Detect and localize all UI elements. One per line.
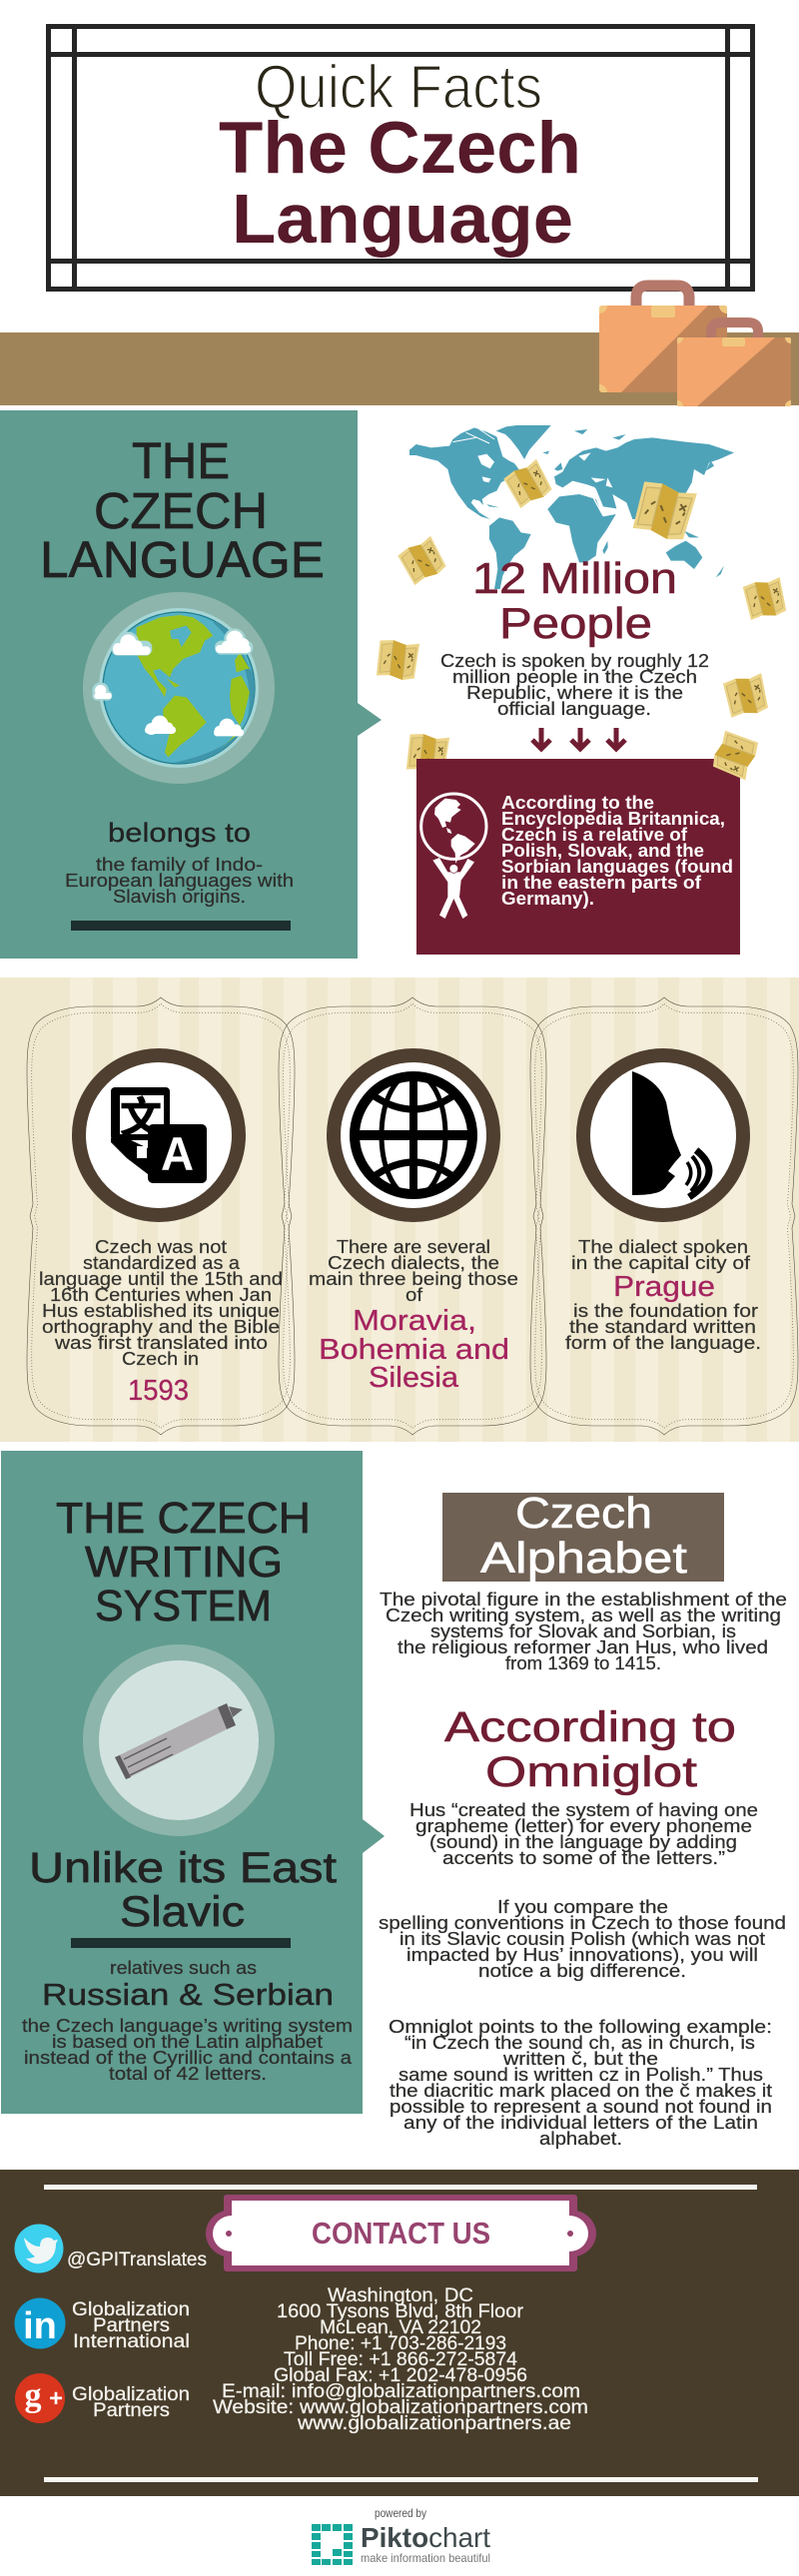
text: latin alphabet: total of 42 letters. bbox=[109, 2063, 267, 2084]
text: dialects: Czech dialects, the bbox=[328, 1252, 499, 1273]
icon: twitter bbox=[14, 2225, 64, 2272]
panel: the czech language bbox=[0, 410, 382, 959]
icon: map 7 bbox=[406, 733, 449, 775]
text: prague dialect: in the capital city of bbox=[571, 1252, 751, 1273]
text: hus quote: grapheme (letter) for every phoneme bbox=[415, 1815, 752, 1836]
icon: small suitcase bbox=[677, 318, 791, 406]
title: quick facts: Quick Facts bbox=[255, 53, 542, 121]
icon: google plus: + bbox=[49, 2385, 63, 2412]
icon: translate bbox=[79, 1055, 239, 1215]
icon: linkedin bbox=[14, 2298, 66, 2348]
text: prague: Prague bbox=[613, 1271, 715, 1303]
text: dialects: There are several bbox=[337, 1236, 490, 1257]
text: dialects: of bbox=[405, 1284, 423, 1305]
heading: according to omniglot: Omniglot bbox=[485, 1748, 697, 1796]
text: google plus name: Partners bbox=[93, 2400, 170, 2421]
text: comparing polish: impacted by Hus’ innovations), you will bbox=[406, 1944, 758, 1965]
icon: speaking face bbox=[583, 1055, 743, 1215]
text: relatives such as: relatives such as bbox=[110, 1957, 257, 1978]
icon: down arrows bbox=[532, 728, 625, 749]
heading: the czech writing system bbox=[56, 1494, 311, 1630]
text: czech speakers: Republic, where it is the bbox=[466, 682, 683, 703]
text: prague dialect: the standard written bbox=[569, 1316, 756, 1337]
text: address: E-mail: info@globalizationpartners.com bbox=[222, 2381, 580, 2402]
text: hus quote bbox=[409, 1799, 758, 1868]
icon: linkedin: in bbox=[23, 2305, 57, 2347]
text: comparing polish: in its Slavic cousin Polish (which was not bbox=[400, 1928, 765, 1949]
text: moravia bohemia silesia: Silesia bbox=[369, 1362, 459, 1394]
text: czech speakers: official language. bbox=[497, 698, 651, 719]
number: 1593: 1593 bbox=[128, 1375, 189, 1407]
card: standardization bbox=[27, 997, 295, 1435]
text: prague dialect: The dialect spoken bbox=[578, 1236, 748, 1257]
text: address bbox=[213, 2285, 588, 2434]
heading: according to omniglot: According to bbox=[444, 1703, 736, 1751]
text: moravia bohemia silesia bbox=[319, 1305, 509, 1394]
icon: translate: 文 bbox=[120, 1084, 162, 1145]
text: prague dialect: is the foundation for bbox=[573, 1300, 758, 1321]
logo: piktochart bbox=[312, 2522, 490, 2565]
heading: the czech language: THE bbox=[132, 432, 230, 489]
text: family of languages: the family of Indo- bbox=[96, 854, 263, 875]
text: czech speakers bbox=[440, 650, 709, 719]
text: family of languages: Slavish origins. bbox=[113, 886, 246, 907]
text: address: Toll Free: +1 866-272-5874 bbox=[284, 2349, 517, 2370]
text: jan hus: The pivotal figure in the establishment of the bbox=[380, 1589, 787, 1610]
text: britannica note: Encyclopedia Britannica, bbox=[501, 808, 725, 829]
heading: unlike its east slavic: Slavic bbox=[120, 1888, 245, 1936]
text: belongs to: belongs to bbox=[108, 818, 251, 848]
title: language: Language bbox=[232, 180, 573, 258]
heading: the czech language: LANGUAGE bbox=[40, 531, 325, 588]
text: latin alphabet: is based on the Latin alphabet bbox=[52, 2031, 323, 2052]
text: comparing polish bbox=[379, 1896, 786, 1981]
heading: unlike its east slavic: Unlike its East bbox=[29, 1844, 337, 1892]
icon: pen bbox=[83, 1644, 275, 1836]
text: linkedin name: Partners bbox=[93, 2315, 170, 2336]
panel: the czech writing system bbox=[1, 1451, 385, 2114]
heading: 12 million people: 12 Million bbox=[472, 554, 677, 603]
icon: map 4 bbox=[742, 576, 788, 622]
text: britannica note: Germany). bbox=[501, 888, 594, 909]
card: prague bbox=[530, 997, 798, 1435]
icon: piktochart mark bbox=[312, 2524, 353, 2565]
text: hus quote: accents to some of the letters.” bbox=[442, 1847, 725, 1868]
icon: map 6 bbox=[723, 672, 770, 719]
text: standardization: Czech in bbox=[122, 1348, 199, 1369]
text: address: Website: www.globalizationpartners.com bbox=[213, 2397, 588, 2418]
text: omniglot example: written č, but the bbox=[502, 2048, 658, 2069]
icon: map 5 bbox=[377, 639, 419, 681]
text: britannica note: in the eastern parts of bbox=[501, 872, 702, 893]
heading: the czech language: CZECH bbox=[94, 482, 268, 539]
text: omniglot example: any of the individual letters of the Latin bbox=[403, 2112, 758, 2133]
heading: the czech writing system: SYSTEM bbox=[95, 1582, 272, 1630]
text: dialects bbox=[309, 1236, 518, 1305]
text: moravia bohemia silesia: Bohemia and bbox=[319, 1334, 509, 1366]
icon: google plus: g bbox=[24, 2377, 42, 2414]
icon: map 2 bbox=[632, 479, 697, 543]
text: address: 1600 Tysons Blvd, 8th Floor bbox=[277, 2301, 524, 2322]
heading: the czech language bbox=[40, 432, 325, 588]
heading box: czech alphabet: Alphabet bbox=[480, 1534, 687, 1583]
text: jan hus: Czech writing system, as well as the writing bbox=[386, 1605, 781, 1625]
icon: map 3 bbox=[397, 535, 448, 587]
text: standardization: Hus established its unique bbox=[42, 1300, 280, 1321]
text: omniglot example: the diacritic mark placed on the č makes it bbox=[390, 2080, 772, 2101]
text: linkedin name: International bbox=[73, 2331, 190, 2352]
plaque: contact us bbox=[206, 2195, 596, 2271]
text: britannica note: Polish, Slovak, and the bbox=[501, 840, 704, 861]
tan band bbox=[0, 332, 799, 405]
panel: dialects band bbox=[0, 977, 799, 1442]
text: piktochart wordmark: Piktochart bbox=[361, 2522, 490, 2553]
heading: 12 million people bbox=[472, 554, 677, 648]
title frame bbox=[48, 26, 753, 290]
text: google plus name bbox=[72, 2384, 190, 2421]
divider bar bbox=[71, 1938, 291, 1948]
card: dialects bbox=[279, 997, 546, 1435]
text: czech speakers: million people in the Czech bbox=[452, 666, 697, 687]
text: standardization: language until the 15th and bbox=[39, 1268, 283, 1289]
text: google plus name: Globalization bbox=[72, 2384, 190, 2405]
text: britannica note bbox=[501, 792, 733, 909]
text: linkedin name bbox=[72, 2299, 190, 2352]
text: britannica note: Sorbian languages (found bbox=[501, 856, 733, 877]
text: standardization: standardized as a bbox=[83, 1252, 241, 1273]
icon: map 8 bbox=[710, 730, 760, 781]
text: standardization: orthography and the Bible bbox=[42, 1316, 280, 1337]
icon: translate: A bbox=[161, 1127, 194, 1180]
text: britannica note: Czech is a relative of bbox=[501, 824, 688, 845]
text: jan hus: the religious reformer Jan Hus, who lived bbox=[398, 1636, 768, 1657]
heading: 12 million people: People bbox=[499, 599, 652, 648]
heading: the czech writing system: THE CZECH bbox=[56, 1494, 311, 1543]
text: omniglot example: Omniglot points to the following example: bbox=[389, 2016, 772, 2037]
text: standardization: 16th Centuries when Jan bbox=[50, 1284, 272, 1305]
text: hus quote: Hus “created the system of having one bbox=[409, 1799, 758, 1820]
text: tagline: make information beautiful bbox=[361, 2551, 490, 2565]
text: omniglot example: possible to represent a sound not found in bbox=[390, 2096, 772, 2117]
text: comparing polish: spelling conventions in Czech to those found bbox=[379, 1912, 786, 1933]
text: linkedin name: Globalization bbox=[72, 2299, 190, 2320]
title: the czech: The Czech bbox=[219, 108, 581, 189]
text: jan hus: from 1369 to 1415. bbox=[505, 1652, 661, 1673]
text: moravia bohemia silesia: Moravia, bbox=[353, 1305, 476, 1337]
text: britannica note: According to the bbox=[501, 792, 654, 813]
icon: map 1 bbox=[502, 458, 554, 510]
text: latin alphabet: the Czech language’s writing system bbox=[22, 2015, 353, 2036]
text: hus quote: (sound) in the language by adding bbox=[429, 1831, 737, 1852]
text: prague dialect bbox=[565, 1236, 761, 1353]
icon: google plus bbox=[15, 2373, 65, 2423]
heading box: czech alphabet bbox=[442, 1489, 724, 1583]
panel: footer bbox=[0, 2170, 799, 2496]
icon: earth globe bbox=[83, 592, 275, 784]
text: jan hus: systems for Slovak and Sorbian, is bbox=[430, 1620, 736, 1641]
text: omniglot example bbox=[389, 2016, 772, 2149]
text: dialects: main three being those bbox=[309, 1268, 518, 1289]
text: address: www.globalizationpartners.ae bbox=[297, 2413, 571, 2434]
text: latin alphabet: instead of the Cyrillic and contains a bbox=[24, 2047, 353, 2068]
text: family of languages bbox=[65, 854, 294, 907]
icon: globe bbox=[334, 1055, 493, 1215]
text: standardization: Czech was not bbox=[95, 1236, 227, 1257]
text: powered by: powered by bbox=[375, 2506, 426, 2520]
text: family of languages: European languages with bbox=[65, 870, 294, 891]
text: contact us: CONTACT US bbox=[312, 2216, 490, 2251]
text: omniglot example: alphabet. bbox=[539, 2128, 622, 2149]
text: twitter handle: @GPITranslates bbox=[67, 2250, 207, 2270]
panel: encyclopedia britannica bbox=[416, 759, 740, 955]
divider bar bbox=[71, 921, 291, 931]
heading: unlike its east slavic bbox=[29, 1844, 337, 1936]
icon: figure holding globe bbox=[421, 794, 486, 919]
text: jan hus bbox=[380, 1589, 787, 1673]
text: address: Global Fax: +1 202-478-0956 bbox=[274, 2365, 527, 2386]
text: prague dialect: form of the language. bbox=[565, 1332, 761, 1353]
text: comparing polish: If you compare the bbox=[497, 1896, 668, 1917]
icon: large suitcase bbox=[599, 280, 727, 392]
text: latin alphabet bbox=[22, 2015, 353, 2084]
text: omniglot example: same sound is written cz in Polish.” Thus bbox=[399, 2064, 763, 2085]
text: address: Washington, DC bbox=[328, 2285, 473, 2306]
heading: the czech writing system: WRITING bbox=[85, 1538, 283, 1587]
text: comparing polish: notice a big difference. bbox=[478, 1960, 686, 1981]
title bbox=[219, 53, 581, 258]
heading: according to omniglot bbox=[444, 1703, 736, 1796]
heading box: czech alphabet: Czech bbox=[515, 1489, 652, 1538]
heading: russian and serbian: Russian & Serbian bbox=[42, 1977, 334, 2012]
text: standardization bbox=[39, 1236, 283, 1369]
text: address: Phone: +1 703-286-2193 bbox=[295, 2333, 506, 2354]
world map bbox=[409, 425, 734, 589]
text: omniglot example: “in Czech the sound ch, as in church, is bbox=[404, 2032, 755, 2053]
text: address: McLean, VA 22102 bbox=[320, 2317, 481, 2338]
text: czech speakers: Czech is spoken by roughly 12 bbox=[440, 650, 709, 671]
text: standardization: was first translated into bbox=[54, 1332, 268, 1353]
